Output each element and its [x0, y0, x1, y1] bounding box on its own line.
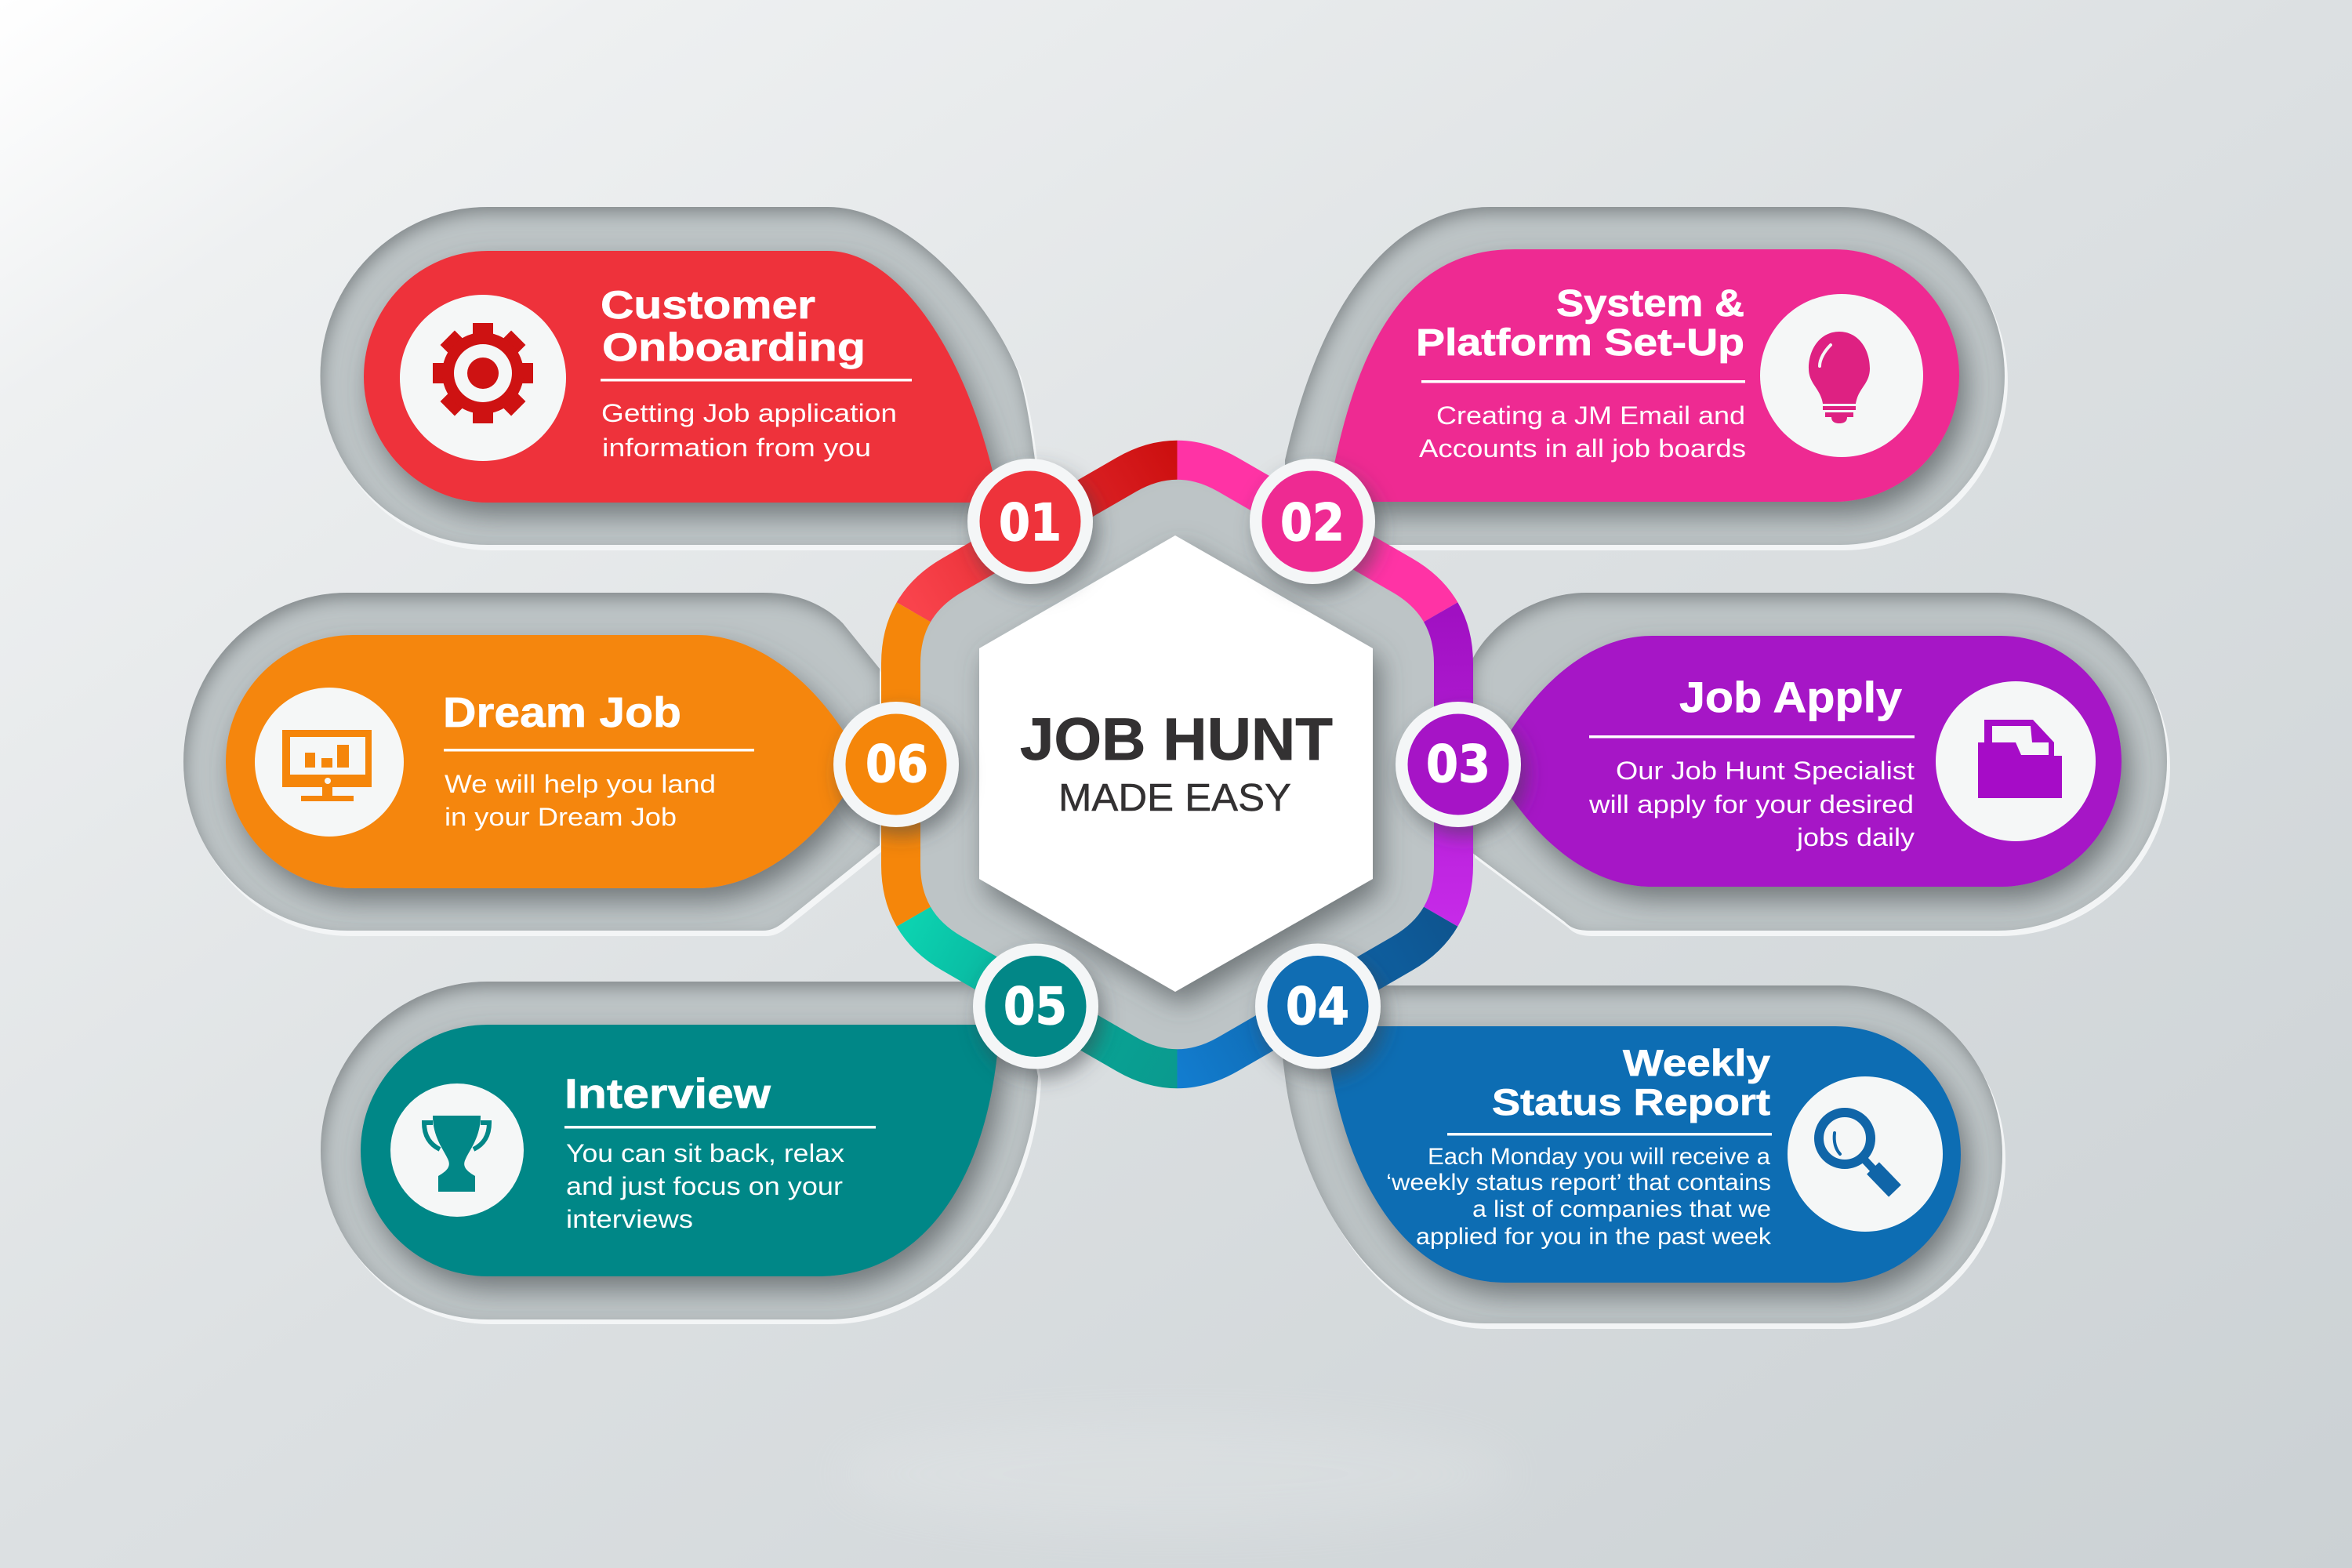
text: weekly report description: ‘weekly status report’ that contains	[1386, 1170, 1771, 1196]
text: platform description: Creating a JM Email and	[1436, 401, 1745, 430]
heading: weekly status report: Weekly	[1623, 1042, 1770, 1083]
badge: 03	[1396, 702, 1521, 827]
heading: interview: Interview	[564, 1071, 771, 1117]
text: onboarding description	[601, 399, 897, 462]
card: 03 purple	[1497, 636, 2122, 887]
icon circle: trophy	[390, 1083, 524, 1217]
heading: weekly status report	[1492, 1042, 1770, 1123]
title: job hunt made easy: JOB HUNT	[1020, 706, 1333, 773]
text: job apply description: jobs daily	[1796, 823, 1915, 851]
panel: 05 interview	[321, 982, 1041, 1324]
heading: dream job: Dream Job	[443, 689, 681, 736]
badge: 05: 05	[1004, 978, 1067, 1036]
text: job apply description	[1588, 757, 1915, 851]
heading: customer onboarding: Customer	[601, 283, 815, 327]
heading: system and platform set-up	[1416, 283, 1744, 364]
text: weekly report description: a list of companies that we	[1472, 1196, 1771, 1222]
badge: 02	[1250, 459, 1375, 584]
badge: 02: 02	[1280, 494, 1345, 553]
badge: 04	[1255, 944, 1381, 1069]
text: dream job description: in your Dream Job	[445, 803, 677, 831]
badge: 05	[973, 944, 1098, 1069]
panel: 04 weekly status report	[1278, 985, 2005, 1329]
heading: system and platform set-up: Platform Set-Up	[1416, 322, 1744, 364]
text: job apply description: Our Job Hunt Specialist	[1616, 757, 1915, 785]
heading: customer onboarding	[601, 283, 866, 369]
text: onboarding description: information from you	[602, 434, 871, 462]
badge: 04: 04	[1286, 978, 1349, 1036]
text: interview description	[566, 1139, 844, 1233]
heading: weekly status report: Status Report	[1492, 1081, 1770, 1123]
icon circle: folder	[1936, 681, 2096, 841]
text: platform description: Accounts in all job boards	[1419, 434, 1746, 463]
panel: 03 job apply	[1472, 593, 2170, 936]
heading: job apply: Job Apply	[1679, 673, 1902, 721]
text: job apply description: will apply for your desired	[1588, 790, 1914, 818]
text: interview description: and just focus on your	[566, 1172, 843, 1200]
heading: system and platform set-up: System &	[1556, 283, 1744, 325]
badge: 03: 03	[1426, 735, 1490, 794]
badge: 06	[833, 702, 959, 827]
panel: 06 dream job	[183, 593, 883, 936]
centre hexagon	[979, 535, 1373, 992]
heading: customer onboarding: Onboarding	[602, 325, 866, 369]
text: onboarding description: Getting Job application	[601, 399, 897, 427]
card: 06 orange	[226, 635, 858, 888]
text: interview description: interviews	[566, 1205, 693, 1233]
title: job hunt made easy: MADE EASY	[1058, 777, 1291, 819]
card: 02 pink	[1327, 249, 1959, 502]
panel: 02 system and platform set-up	[1285, 207, 2008, 550]
badge: 01: 01	[999, 494, 1062, 553]
text: weekly report description: applied for you in the past week	[1416, 1224, 1772, 1250]
icon circle: magnifier	[1788, 1076, 1943, 1232]
badge: 06: 06	[866, 735, 928, 794]
icon circle: monitor	[255, 688, 404, 837]
text: interview description: You can sit back, relax	[566, 1139, 844, 1167]
panel: 01 customer onboarding	[321, 207, 1042, 550]
title: job hunt made easy	[1020, 706, 1333, 819]
icon circle: gear	[400, 295, 566, 461]
text: weekly report description	[1386, 1144, 1772, 1250]
badge: 01	[967, 459, 1093, 584]
central hexagon ring	[901, 460, 1454, 1069]
text: weekly report description: Each Monday you will receive a	[1428, 1144, 1770, 1170]
card: 05 teal	[361, 1025, 1000, 1276]
text: platform description	[1419, 401, 1746, 463]
card: 01 red	[364, 251, 1000, 503]
icon circle: light bulb	[1760, 294, 1923, 457]
text: dream job description	[445, 770, 716, 831]
text: dream job description: We will help you land	[445, 770, 716, 798]
card: 04 blue	[1325, 1026, 1961, 1283]
